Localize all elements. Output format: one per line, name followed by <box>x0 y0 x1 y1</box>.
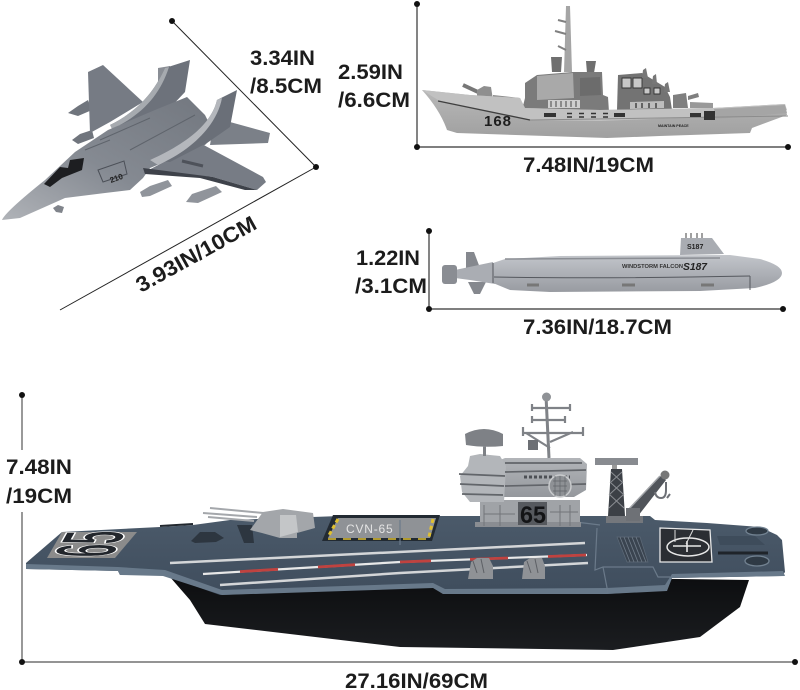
island superstructure <box>459 454 587 529</box>
CVN deck panel <box>322 515 440 541</box>
hull name: MAINTAIN PEACE <box>658 124 689 128</box>
submarine height label: /3.1CM <box>355 274 427 298</box>
runway lines <box>170 543 588 585</box>
submarine <box>442 233 782 294</box>
hull <box>170 575 749 650</box>
submarine height label <box>355 246 427 298</box>
destroyer ship <box>422 6 788 138</box>
vent grille <box>617 537 648 562</box>
submarine height label: 1.22IN <box>356 246 420 270</box>
jet length label: 3.93IN/10CM <box>132 211 261 297</box>
island number: 65 <box>520 502 546 529</box>
destroyer height label: /6.6CM <box>338 88 410 112</box>
bollards <box>468 558 545 579</box>
helipad <box>660 528 712 562</box>
destroyer dimension lines <box>414 1 791 150</box>
flight deck <box>26 516 785 595</box>
bow deck number: 65 <box>35 531 145 557</box>
hull name: WINDSTORM FALCON <box>622 264 683 270</box>
main mast <box>523 392 583 458</box>
submarine length label: 7.36IN/18.7CM <box>523 315 672 339</box>
crane <box>626 470 670 521</box>
carrier height label: /19CM <box>6 484 72 508</box>
submarine dimension lines <box>426 228 786 312</box>
jet dimension lines <box>60 18 319 310</box>
front deck fixture <box>191 532 224 543</box>
jet width label <box>250 46 322 98</box>
jet width label: 3.34IN <box>250 46 315 70</box>
panel seams <box>400 520 670 593</box>
carrier height label: 7.48IN <box>6 455 72 479</box>
destroyer height label <box>338 60 410 112</box>
destroyer height label: 2.59IN <box>338 60 403 84</box>
fighter jet <box>2 60 270 220</box>
CVN deck panel: CVN-65 <box>346 522 393 536</box>
carrier height label <box>6 455 72 508</box>
hull code: S187 <box>683 262 707 273</box>
destroyer length label: 7.48IN/19CM <box>523 153 654 177</box>
aircraft carrier <box>26 392 785 650</box>
jet number: 210 <box>109 172 125 185</box>
radar dish <box>465 429 503 456</box>
hull number: 168 <box>484 113 512 130</box>
radar tower <box>595 458 643 523</box>
gun turret <box>203 508 315 543</box>
carrier dimension lines <box>19 392 798 665</box>
bow circles <box>745 527 769 566</box>
sail code: S187 <box>687 244 703 251</box>
jet width label: /8.5CM <box>250 74 322 98</box>
